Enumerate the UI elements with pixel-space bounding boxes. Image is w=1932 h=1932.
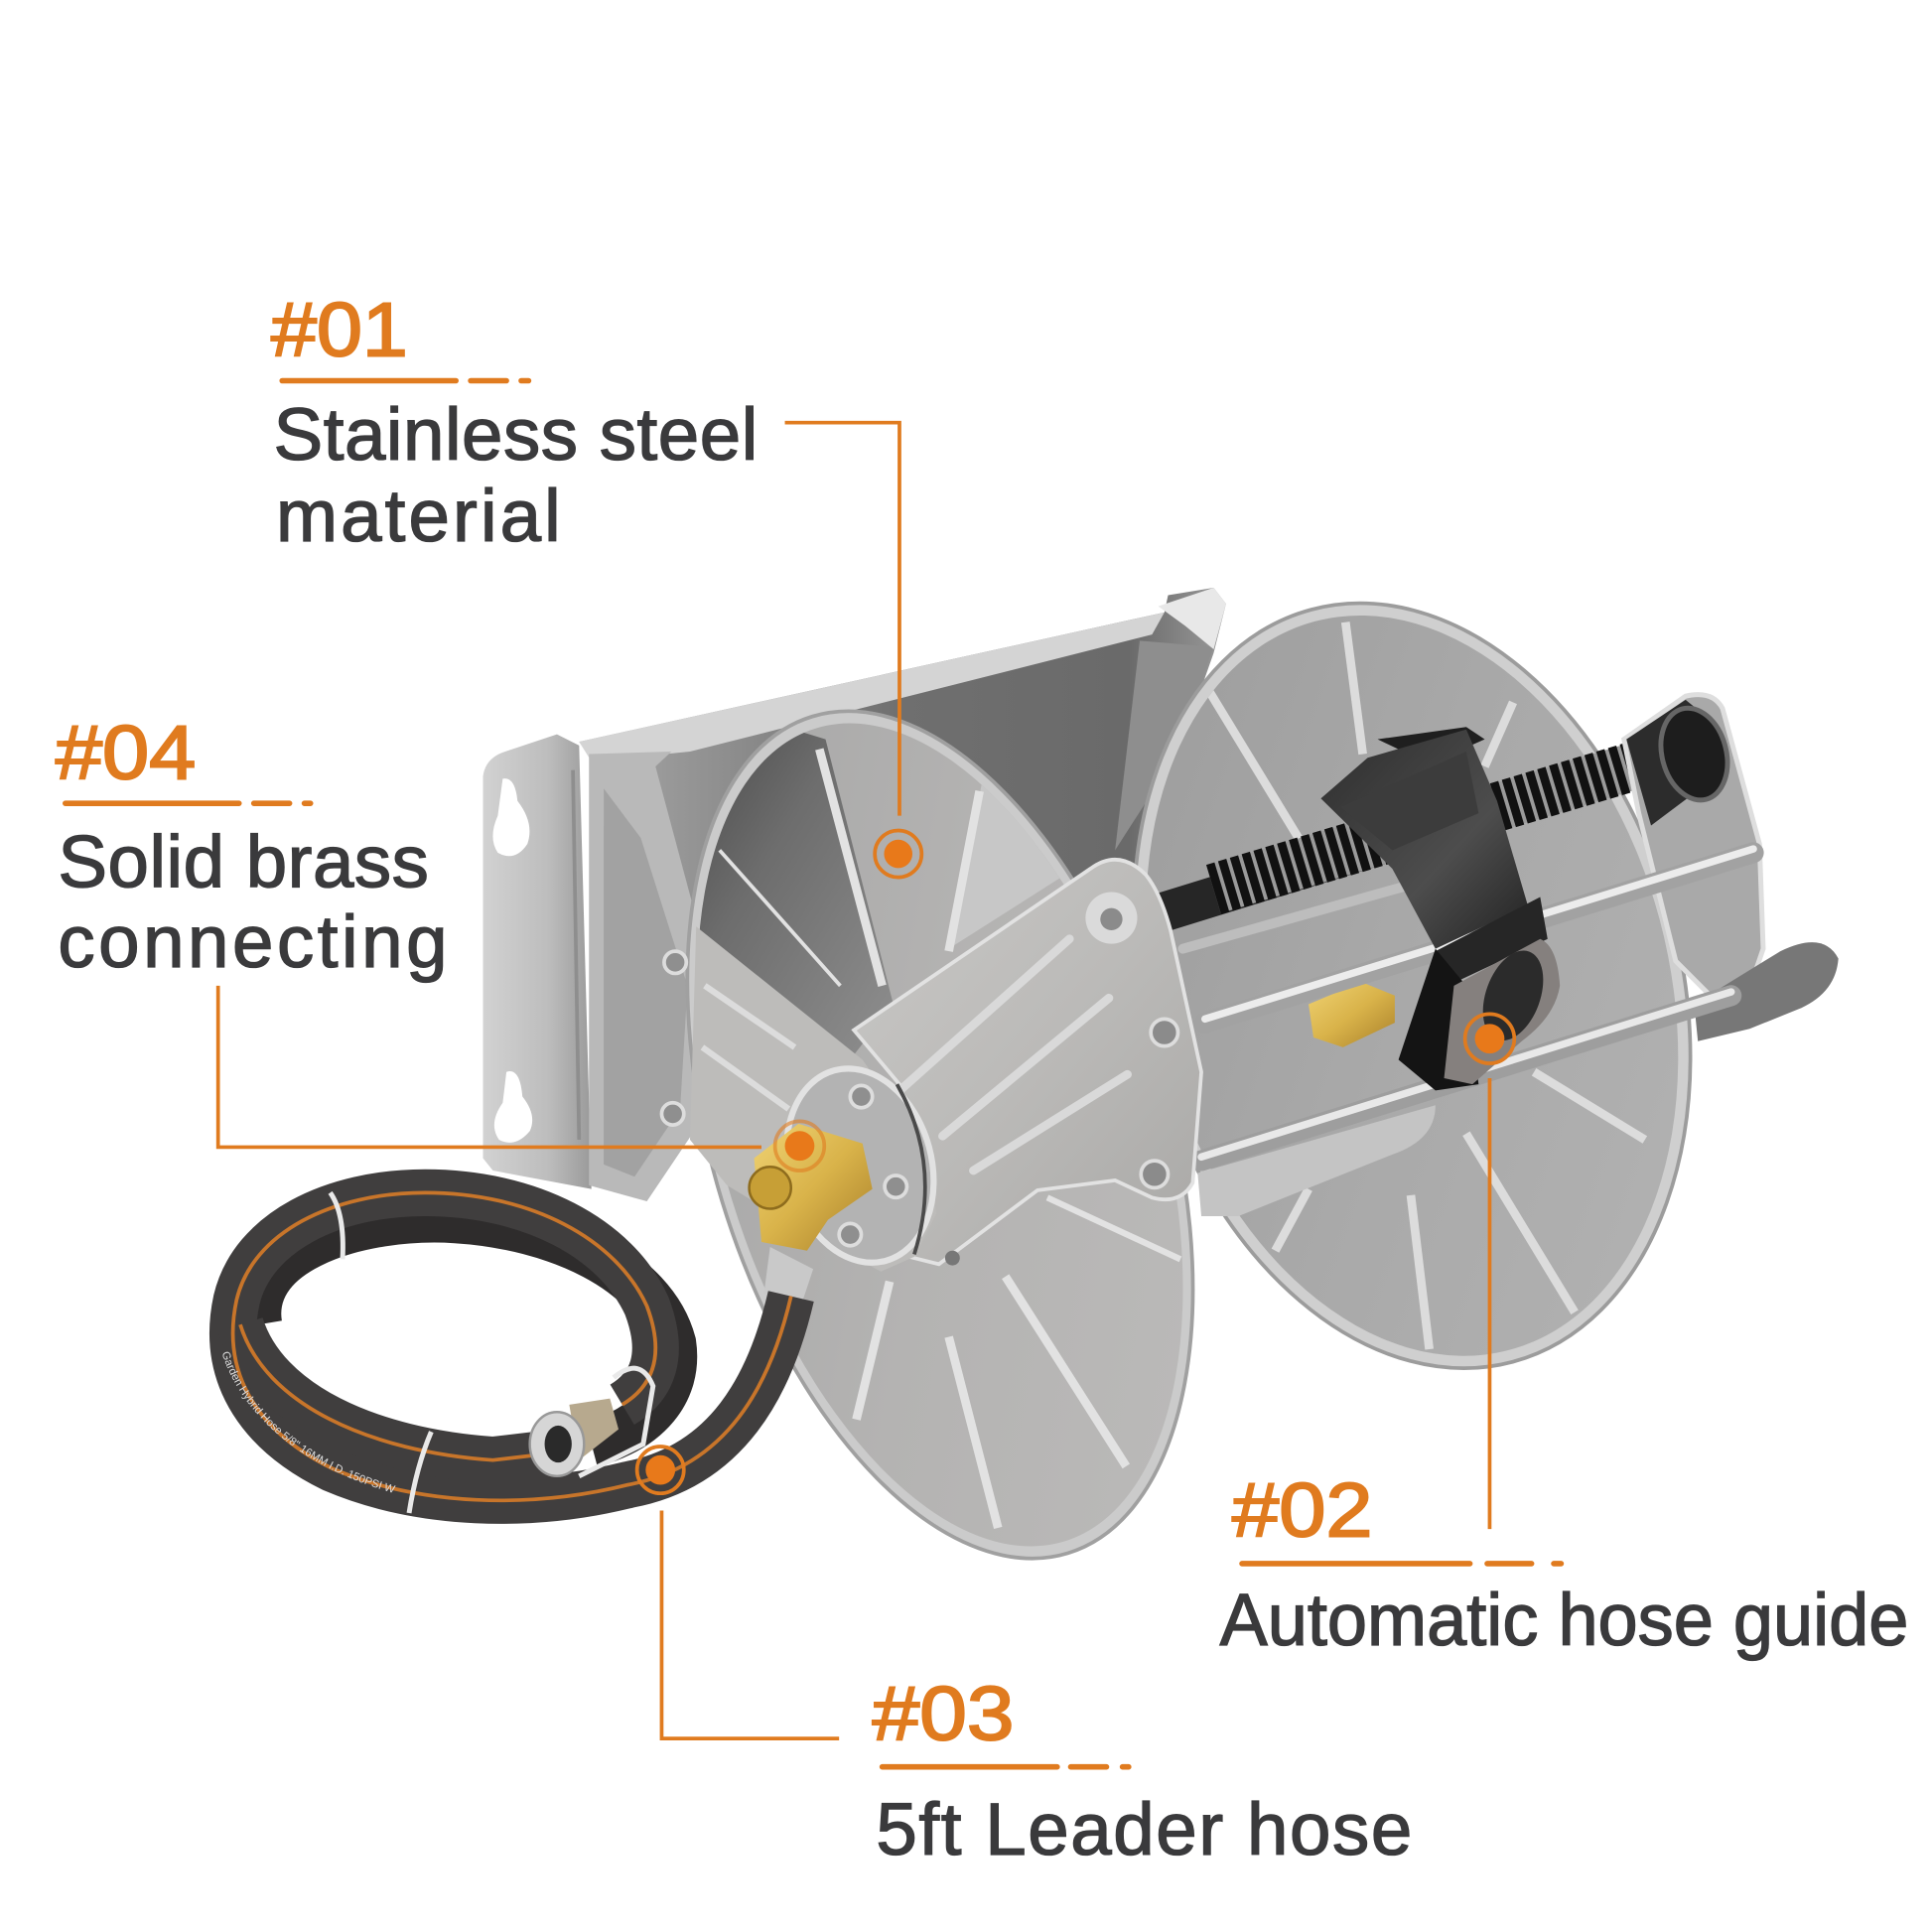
label: Solid brass xyxy=(58,821,429,903)
solid brass elbow connector xyxy=(750,1124,873,1307)
front hose loop xyxy=(233,1192,791,1500)
hose printing: Garden Hybrid Hose 5/8" 16MM I.D. 150PSI W.P. xyxy=(222,1352,395,1493)
threaded drive shaft with spring xyxy=(1165,746,1701,911)
underline xyxy=(66,801,311,805)
far end bracket xyxy=(1624,695,1763,1004)
front arm plate xyxy=(854,860,1201,1264)
heading #01: #01 xyxy=(271,288,408,373)
label: material xyxy=(276,475,561,557)
guide rods xyxy=(1182,849,1753,1216)
label: Automatic hose guide xyxy=(1220,1579,1908,1661)
automatic hose guide block xyxy=(1320,727,1560,1090)
marker xyxy=(637,1447,684,1493)
illustration: stainless steel wall-mounted hose reel xyxy=(208,588,1839,1561)
heading #04: #04 xyxy=(56,710,196,795)
front reel disc xyxy=(685,709,1195,1561)
marker xyxy=(875,830,921,878)
heading #02: #02 xyxy=(1232,1468,1373,1554)
leader line xyxy=(1488,1078,1491,1529)
rear reel disc xyxy=(1134,602,1692,1370)
marker xyxy=(1465,1014,1514,1063)
orange hose stripes xyxy=(233,1192,791,1500)
marker xyxy=(775,1121,824,1171)
underline xyxy=(282,378,528,383)
callout 02: automatic hose guide xyxy=(1220,1014,1908,1661)
heading #03: #03 xyxy=(873,1671,1014,1756)
leader line xyxy=(661,1511,839,1738)
callout 01: stainless steel material xyxy=(271,288,921,878)
hose end coupling xyxy=(530,1399,619,1476)
underline xyxy=(883,1764,1129,1769)
callout 04: solid brass connecting xyxy=(56,710,824,1171)
callout 03: 5ft leader hose xyxy=(637,1447,1412,1870)
underline xyxy=(1242,1562,1561,1566)
leader hose coil xyxy=(208,1170,814,1524)
wall mounting bracket xyxy=(483,588,1226,1201)
leader line xyxy=(785,423,899,816)
label: connecting xyxy=(58,900,448,983)
inner hose turn xyxy=(240,1324,567,1460)
lower pivot plate and hub xyxy=(661,926,960,1280)
leader line xyxy=(218,986,761,1147)
zip ties xyxy=(331,1192,653,1513)
rear hose loop xyxy=(258,1219,674,1445)
label: Stainless steel xyxy=(274,393,758,476)
label: 5ft Leader hose xyxy=(876,1788,1412,1870)
side handle xyxy=(1694,942,1839,1041)
brass nut behind guide xyxy=(1309,982,1395,1047)
